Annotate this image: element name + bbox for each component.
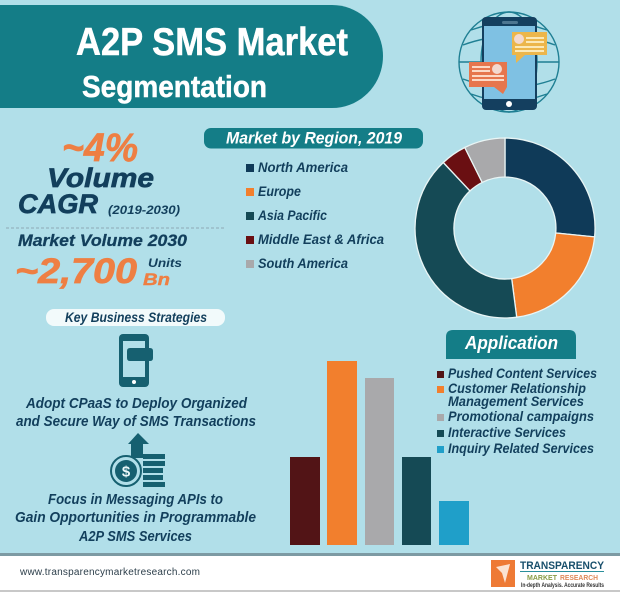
title: A2P SMS Market xyxy=(76,21,348,64)
application legend: Management Services xyxy=(448,393,584,409)
logo: Transparency Market Research xyxy=(491,560,605,589)
application legend: Customer Relationship xyxy=(448,380,586,396)
strategy two text: A2P SMS Services xyxy=(78,528,192,545)
application legend xyxy=(437,365,597,456)
region legend: North America xyxy=(258,160,348,175)
market volume stat xyxy=(15,232,188,291)
market volume stat: Units xyxy=(148,256,182,270)
CAGR stat: ~4% xyxy=(62,126,138,170)
strategy one text: Adopt CPaaS to Deploy Organized xyxy=(25,395,248,412)
application legend: Inquiry Related Services xyxy=(448,440,594,456)
bar chart xyxy=(290,361,469,545)
region legend xyxy=(246,160,384,271)
application heading xyxy=(446,330,576,359)
CAGR stat: CAGR xyxy=(18,189,99,219)
strategy two text: Focus in Messaging APIs to xyxy=(48,491,223,508)
CAGR stat xyxy=(18,126,180,219)
strategy two text: Gain Opportunities in Programmable xyxy=(15,509,256,526)
strategy one text xyxy=(16,395,256,430)
logo: Transparency Market Research: TRANSPARENCY xyxy=(520,560,605,572)
logo: Transparency Market Research: RESEARCH xyxy=(560,573,598,582)
market volume stat: ~2,700 xyxy=(15,252,138,291)
region legend: Asia Pacific xyxy=(257,208,327,223)
region legend: Middle East & Africa xyxy=(258,232,384,247)
icon: coin stack with arrow: $ xyxy=(122,464,131,480)
strategy one text: and Secure Way of SMS Transactions xyxy=(16,413,256,430)
donut chart xyxy=(415,138,595,318)
application legend: Promotional campaigns xyxy=(448,408,594,424)
icon: coin stack with arrow xyxy=(111,433,165,487)
region legend: Europe xyxy=(258,184,301,199)
icon: phone message xyxy=(119,334,153,387)
header banner xyxy=(0,5,383,108)
strategy two text xyxy=(15,491,256,545)
CAGR stat: Volume xyxy=(47,163,154,193)
website url: www.transparencymarketresearch.com xyxy=(19,567,200,578)
region legend: South America xyxy=(258,256,348,271)
market volume stat: Market Volume 2030 xyxy=(18,232,188,250)
logo: Transparency Market Research: MARKET xyxy=(527,573,557,582)
strategies heading: Key Business Strategies xyxy=(65,310,207,325)
dotted divider xyxy=(6,227,226,229)
title xyxy=(76,21,348,104)
CAGR stat: (2019-2030) xyxy=(108,205,180,217)
logo: Transparency Market Research: In-depth Analysis. Accurate Results xyxy=(521,583,605,589)
icon: phone with globe and chat bubbles xyxy=(459,12,559,112)
application legend: Pushed Content Services xyxy=(448,365,597,381)
footer xyxy=(0,553,620,592)
region heading: Market by Region, 2019 xyxy=(226,130,403,148)
title: Segmentation xyxy=(82,69,267,104)
application heading: Application xyxy=(464,333,558,353)
application legend: Interactive Services xyxy=(448,424,566,440)
market volume stat: Bn xyxy=(143,270,170,289)
